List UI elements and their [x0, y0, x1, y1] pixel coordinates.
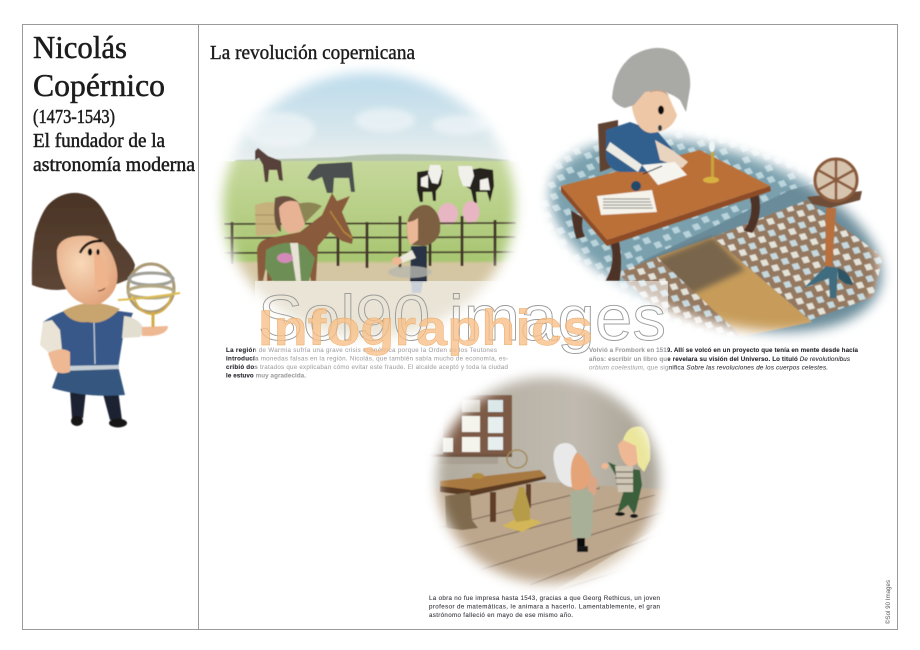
watermark: Sol90 Images: Sol90 images: [258, 282, 666, 354]
text: paragraph Rethicus: astrónomo falleció en mayo de ese mismo año.: [429, 612, 573, 619]
overlay: watermark panel: [255, 281, 668, 381]
icon: window: [430, 395, 512, 457]
icon: table with instruments: [440, 450, 546, 532]
title block: astronomía moderna: [33, 154, 195, 176]
text: paragraph Warmia: [226, 347, 509, 380]
text: paragraph Warmia: introducía monedas falsas en la región. Nicolás, que también sabía mucho de economía, es-: [226, 356, 508, 362]
icon: pigs: [438, 201, 480, 225]
title block: Copérnico: [33, 67, 165, 103]
icon: desk with papers, candle and man: [561, 48, 771, 280]
icon: Rethicus with books: [602, 427, 650, 518]
icon: girl with basket: [388, 205, 440, 293]
fence: [224, 216, 516, 268]
icon: man in green: [265, 196, 315, 281]
icon: armillary sphere on stand: [804, 159, 862, 298]
icon: horse: [255, 148, 283, 182]
text: paragraph Warmia: le estuvo muy agradecida.: [226, 372, 306, 380]
icon: black cow: [307, 162, 355, 193]
text: paragraph Rethicus: La obra no fue impresa hasta 1543, gracias a que Georg Rethicus, un joven: [429, 595, 661, 602]
title block: El fundador de la: [33, 130, 165, 152]
icon: old Copernicus: [553, 443, 598, 552]
text: paragraph Frombork: [589, 347, 859, 372]
icon: Copernicus character with armillary sphere: [32, 193, 180, 428]
text: paragraph Frombork: orbium coelestium, que significa Sobre las revoluciones de los cuerpos celestes.: [589, 364, 828, 372]
icon: mule with packs: [255, 193, 353, 281]
title block: Nicolás: [33, 29, 127, 65]
text: paragraph Frombork: Volvió a Frombork en 1519. Allí se volcó en un proyecto que tenía en mente desde hacía: [589, 347, 859, 354]
left column divider: [198, 24, 200, 630]
text: paragraph Rethicus: [429, 595, 661, 619]
credit: ©Sol 90 Images: [885, 580, 892, 624]
watermark: Infographics: Infographics: [258, 300, 593, 356]
icon: spotted cow right: [458, 166, 494, 203]
illustration: Rethicus visits Copernicus: [429, 370, 667, 592]
text: paragraph Rethicus: profesor de matemáticas, le animara a hacerlo. Lamentablemente, el gran: [429, 604, 661, 610]
heading: La revolución copernicana: [210, 42, 415, 64]
icon: spotted cow left: [417, 165, 443, 202]
title block: [33, 29, 195, 176]
illustration: farm scene: [210, 60, 530, 351]
text: paragraph Warmia: La región de Warmia sufría una grave crisis económica porque la Orden de los Teutones: [226, 347, 497, 354]
text: paragraph Frombork: años: escribir un libro que revelara su visión del Universo. Lo tituló De revolutionibus: [589, 356, 850, 363]
text: paragraph Warmia: cribió dos tratados que explicaban cómo evitar este fraude. El alcalde aceptó y toda la ciudad: [226, 364, 509, 371]
illustration: Copernicus writing at desk: [542, 130, 890, 341]
title block: (1473-1543): [33, 106, 115, 128]
